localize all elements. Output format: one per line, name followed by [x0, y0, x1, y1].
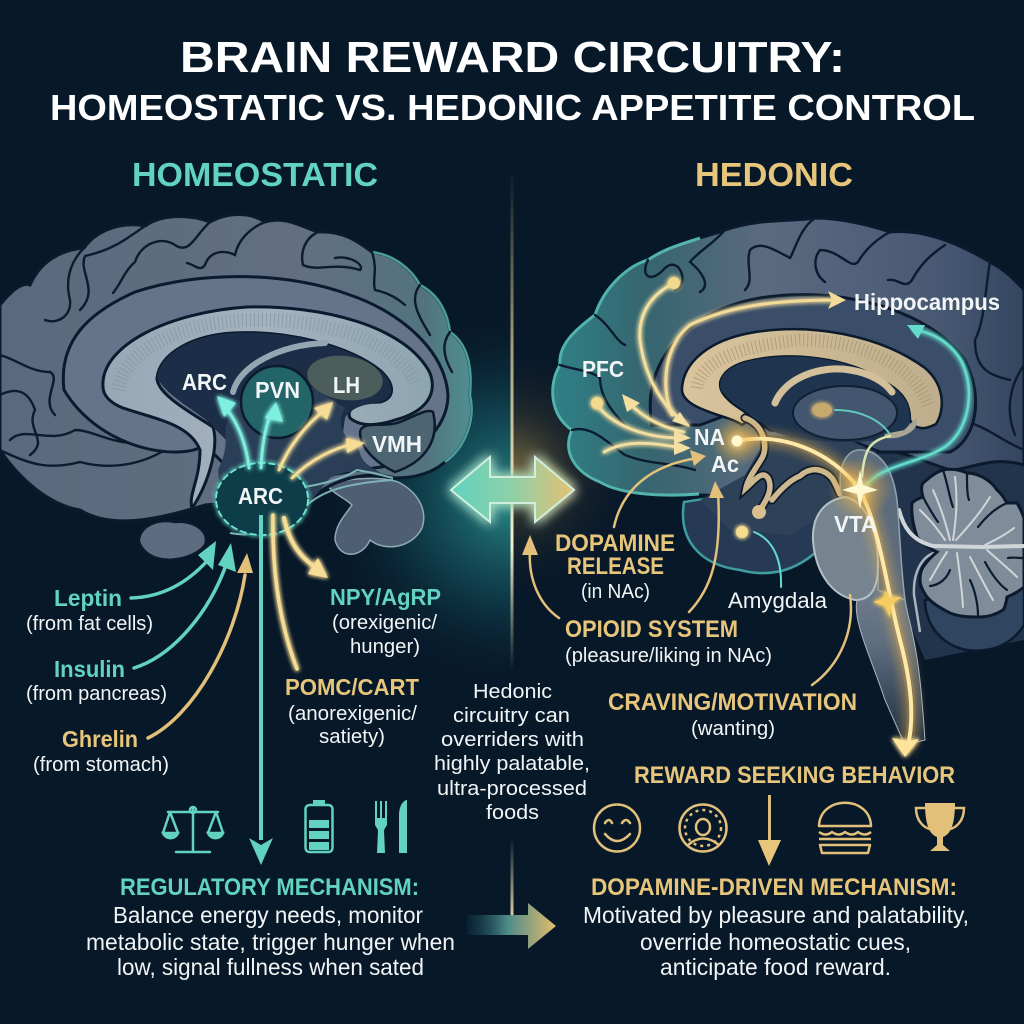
neuropeptide labels: (orexigenic/: [332, 612, 437, 634]
hormone labels: Leptin: [54, 585, 122, 611]
double arrow: [451, 457, 574, 522]
main reward glow: [737, 439, 911, 745]
icon: balance scale: [163, 807, 223, 852]
tan stalk shadow: [745, 418, 840, 510]
PVN nucleus: [241, 366, 313, 438]
tan stalk bulb: [752, 505, 766, 519]
cortex: [0, 214, 472, 521]
VTA glow: [828, 457, 892, 521]
icon: fork and knife: [375, 800, 407, 853]
title: [50, 33, 975, 128]
center note: highly palatable,: [434, 753, 590, 775]
icon: burger: [819, 803, 871, 853]
center note: overriders with: [441, 729, 584, 751]
tan stalk: [745, 418, 840, 510]
cerebellum back lobe: [925, 585, 1024, 651]
left brain labels: ARC: [238, 483, 283, 509]
left brain labels: VMH: [372, 431, 422, 457]
temporal lobe: [683, 491, 815, 573]
amygdala line: [754, 532, 781, 587]
transition arrow: [467, 903, 556, 949]
thalamic spot: [812, 403, 832, 417]
hedonic labels: (in NAc): [581, 581, 650, 603]
heading: hedonic: HEDONIC: [695, 156, 853, 193]
panel text: dopamine-driven mechanism: DOPAMINE-DRIVEN MECHANISM:: [591, 874, 957, 901]
panel text: regulatory mechanism: REGULATORY MECHANISM:: [120, 874, 419, 901]
opioid arrowhead: [709, 481, 724, 498]
right brain labels: Hippocampus: [854, 289, 1000, 315]
panel text: dopamine-driven mechanism: Motivated by pleasure and palatability,: [583, 902, 969, 928]
cerebellum left strip: [914, 552, 937, 632]
center note: circuitry can: [453, 705, 570, 727]
corpus callosum: [682, 329, 942, 428]
panel text: dopamine-driven mechanism: anticipate food reward.: [660, 954, 891, 980]
neuropeptide labels: satiety): [319, 726, 385, 748]
tan tip under callosum: [885, 422, 915, 436]
stalk outline: [230, 470, 393, 534]
hedonic labels: RELEASE: [567, 553, 664, 580]
hedonic labels: [555, 530, 955, 789]
main reward pathway: [737, 439, 911, 745]
neuropeptide labels: hunger): [350, 636, 420, 658]
panel text: regulatory mechanism: [86, 874, 455, 980]
cerebellum: [912, 469, 1024, 617]
VTA to thalamus: [862, 436, 890, 477]
hedonic labels: (pleasure/liking in NAc): [565, 645, 772, 667]
center note: ultra-processed: [437, 778, 587, 800]
teal hippocampus arrow: [865, 330, 969, 487]
icon: battery: [306, 800, 332, 852]
left brain: homeostatic: [0, 214, 472, 560]
hormone labels: Insulin: [54, 656, 125, 682]
center divider line: [510, 170, 514, 670]
hormone labels: Ghrelin: [62, 726, 138, 752]
panel text: regulatory mechanism: metabolic state, trigger hunger when: [86, 929, 455, 955]
cortical sulci: [560, 218, 1024, 470]
hedonic labels: CRAVING/MOTIVATION: [608, 689, 857, 716]
spark: [873, 590, 902, 618]
PFC neuron dots: [591, 277, 680, 409]
panel text: regulatory mechanism: Balance energy needs, monitor: [113, 902, 423, 928]
opioid to release arrow: [530, 550, 559, 618]
brainstem lower: [856, 540, 925, 745]
right brain labels: PFC: [582, 356, 624, 382]
hormone input arrows: [131, 541, 253, 738]
release arrowhead: [522, 535, 538, 555]
VTA starburst: [842, 470, 878, 509]
NAc glow: [711, 415, 763, 467]
dopamine to NA arrow: [614, 458, 698, 527]
icon: smiley: [594, 804, 640, 852]
hippocampus arrow: [666, 300, 835, 415]
right brain labels: [582, 289, 1000, 613]
left brain labels: [182, 369, 422, 509]
fornix arc: [233, 343, 325, 392]
down arrow: homeostatic: [249, 515, 273, 865]
cerebellum branches: [899, 477, 1024, 607]
title: BRAIN REWARD CIRCUITRY:: [180, 33, 845, 82]
brainstem lobe: [327, 478, 424, 554]
right brain pathway arrows: [522, 277, 969, 757]
thalamus oval: [793, 386, 897, 440]
NAc starburst: [732, 436, 742, 446]
corpus callosum: [103, 307, 432, 508]
hormone labels: [26, 585, 169, 776]
down arrow: hedonic: [758, 795, 781, 866]
PFC pathways: [597, 283, 688, 452]
cortex: [553, 218, 1024, 500]
PFC arrowheads: [622, 394, 691, 455]
cerebellum fissures: [923, 470, 1024, 615]
inner ventricle: [157, 333, 392, 440]
panel text: dopamine-driven mechanism: override homeostatic cues,: [640, 929, 911, 955]
right brain labels: Ac: [711, 451, 739, 477]
hippocampus arrowhead: [828, 291, 846, 309]
icon: trophy: [916, 803, 964, 851]
inner tan arc: [775, 369, 892, 403]
cortical sulci: [0, 222, 452, 466]
neuropeptide labels: [285, 584, 441, 748]
teal cortex rim: [553, 238, 700, 495]
midbrain area: [700, 435, 880, 535]
deep fill behind cerebellum: [870, 450, 1024, 660]
temporal pole lobe: [139, 521, 206, 560]
hedonic labels: OPIOID SYSTEM: [565, 616, 738, 643]
VMH pocket: [360, 411, 435, 472]
thalamic teal line: [835, 410, 889, 433]
dopamine arrowhead: [690, 450, 706, 466]
craving line: [812, 595, 851, 685]
hormone labels: (from stomach): [33, 754, 169, 776]
left brain pathway arrows: [217, 396, 365, 669]
panel text: dopamine-driven mechanism: [583, 874, 969, 980]
panel text: regulatory mechanism: low, signal fullness when sated: [117, 954, 424, 980]
vertical connector: [510, 837, 514, 921]
hormone labels: (from pancreas): [26, 683, 167, 705]
right brain labels: Amygdala: [728, 588, 828, 613]
icon: donut: [680, 804, 726, 852]
cingulate band: [650, 295, 976, 452]
hypothalamus area: [218, 380, 385, 532]
hormone labels: (from fat cells): [26, 613, 153, 635]
left brain labels: PVN: [255, 377, 300, 403]
teal arrowhead: [907, 325, 925, 339]
LH region: [304, 351, 386, 405]
heading: homeostatic: HOMEOSTATIC: [132, 156, 378, 193]
right brain labels: VTA: [834, 511, 877, 537]
title: HOMEOSTATIC VS. HEDONIC APPETITE CONTROL: [50, 87, 975, 128]
left brain labels: ARC: [182, 369, 227, 395]
hedonic labels: (wanting): [691, 718, 775, 740]
center note: [434, 681, 590, 824]
neuropeptide labels: POMC/CART: [285, 674, 419, 700]
amygdala spot: [736, 526, 748, 538]
ARC nucleus glow: [216, 463, 308, 535]
teal cortex rim: [372, 252, 472, 462]
neuropeptide labels: (anorexigenic/: [288, 703, 417, 725]
right brain labels: NA: [694, 424, 725, 450]
callosum hatching: [697, 340, 928, 405]
hedonic labels: REWARD SEEKING BEHAVIOR: [634, 762, 955, 789]
inner ventricle: [720, 356, 910, 442]
hedonic labels: DOPAMINE: [555, 530, 675, 557]
VTA bulb: [813, 497, 878, 600]
center note: Hedonic: [473, 681, 552, 703]
callosum hatching: [118, 320, 415, 390]
center note: foods: [486, 802, 539, 824]
brainstem upper column: [840, 450, 905, 600]
neuropeptide labels: NPY/AgRP: [330, 584, 441, 610]
reward arrowhead: [892, 738, 919, 757]
right brain: hedonic: [553, 218, 1024, 745]
left brain labels: LH: [333, 372, 360, 398]
cingulate gyrus: [63, 277, 448, 480]
opioid to Ac arrow: [689, 492, 719, 612]
